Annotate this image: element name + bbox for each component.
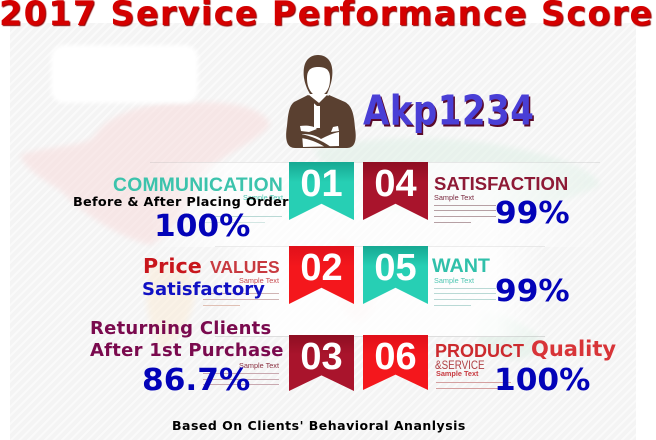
sub heading: satisfactory: Satisfactory: [142, 279, 265, 300]
sub heading: Before & After Placing Order: [73, 195, 289, 210]
sample text: Sample Text: [434, 193, 474, 202]
panel: 01 communication: [73, 162, 354, 244]
heading: quality: Quality: [531, 337, 616, 361]
lines: [436, 382, 511, 383]
heading: values: VALUES: [210, 257, 280, 277]
panel: 04 satisfaction: [363, 162, 570, 231]
heading: product: PRODUCT: [435, 341, 524, 361]
icon: businessman with crossed arms: [286, 55, 356, 148]
heading: returning clients: Returning Clients After 1st Purchase: [90, 318, 284, 361]
heading: satisfaction: SATISFACTION: [434, 173, 568, 194]
ribbon 04: [363, 162, 428, 220]
sample text: Sample Text: [436, 369, 478, 378]
ribbon 01: 01: [300, 163, 343, 205]
ribbon 02: [289, 246, 354, 304]
sub heading: service: &SERVICE: [435, 358, 485, 372]
ribbon 05: 05: [374, 247, 417, 289]
percentage: 99%: [495, 274, 570, 309]
heading: communication: COMMUNICATION: [113, 175, 283, 196]
ribbon 06: [363, 335, 428, 390]
footer note: Based On Clients' Behavioral Ananlysis: [172, 418, 466, 432]
percentage: 100%: [494, 363, 590, 398]
ribbon 03: 03: [300, 336, 343, 378]
lines: [203, 293, 279, 294]
ribbon 04: 04: [374, 163, 417, 205]
ribbon 03: [289, 335, 354, 391]
panel: 06 product quality: [363, 335, 616, 398]
percentage: 100%: [154, 209, 250, 244]
ribbon 06: 06: [374, 336, 417, 378]
sample text: Sample Text: [434, 276, 474, 285]
panel: 05 want: [363, 246, 570, 309]
heading: want: WANT: [432, 255, 490, 277]
ribbon 01: [289, 162, 354, 220]
panel: 02 price values: [142, 246, 354, 306]
white band: upper row: [150, 162, 600, 247]
sample text: Sample Text: [239, 276, 279, 285]
lines: [434, 288, 496, 289]
white blotch over the map: [54, 48, 195, 100]
lines: [434, 205, 496, 206]
ribbon 02: 02: [300, 247, 343, 289]
lines: [203, 373, 279, 374]
heading: price: Price: [143, 254, 202, 278]
percentage: 99%: [495, 196, 570, 231]
lines: [205, 216, 282, 217]
ribbon 05: [363, 246, 428, 304]
sample text: Sample Text: [239, 361, 279, 370]
username: Akp1234: [363, 87, 534, 135]
panel: 03 returning clients: [90, 318, 354, 398]
sample text: Sample Text: [243, 193, 283, 202]
percentage: 86.7%: [142, 363, 250, 398]
white band: middle row: [215, 246, 545, 337]
